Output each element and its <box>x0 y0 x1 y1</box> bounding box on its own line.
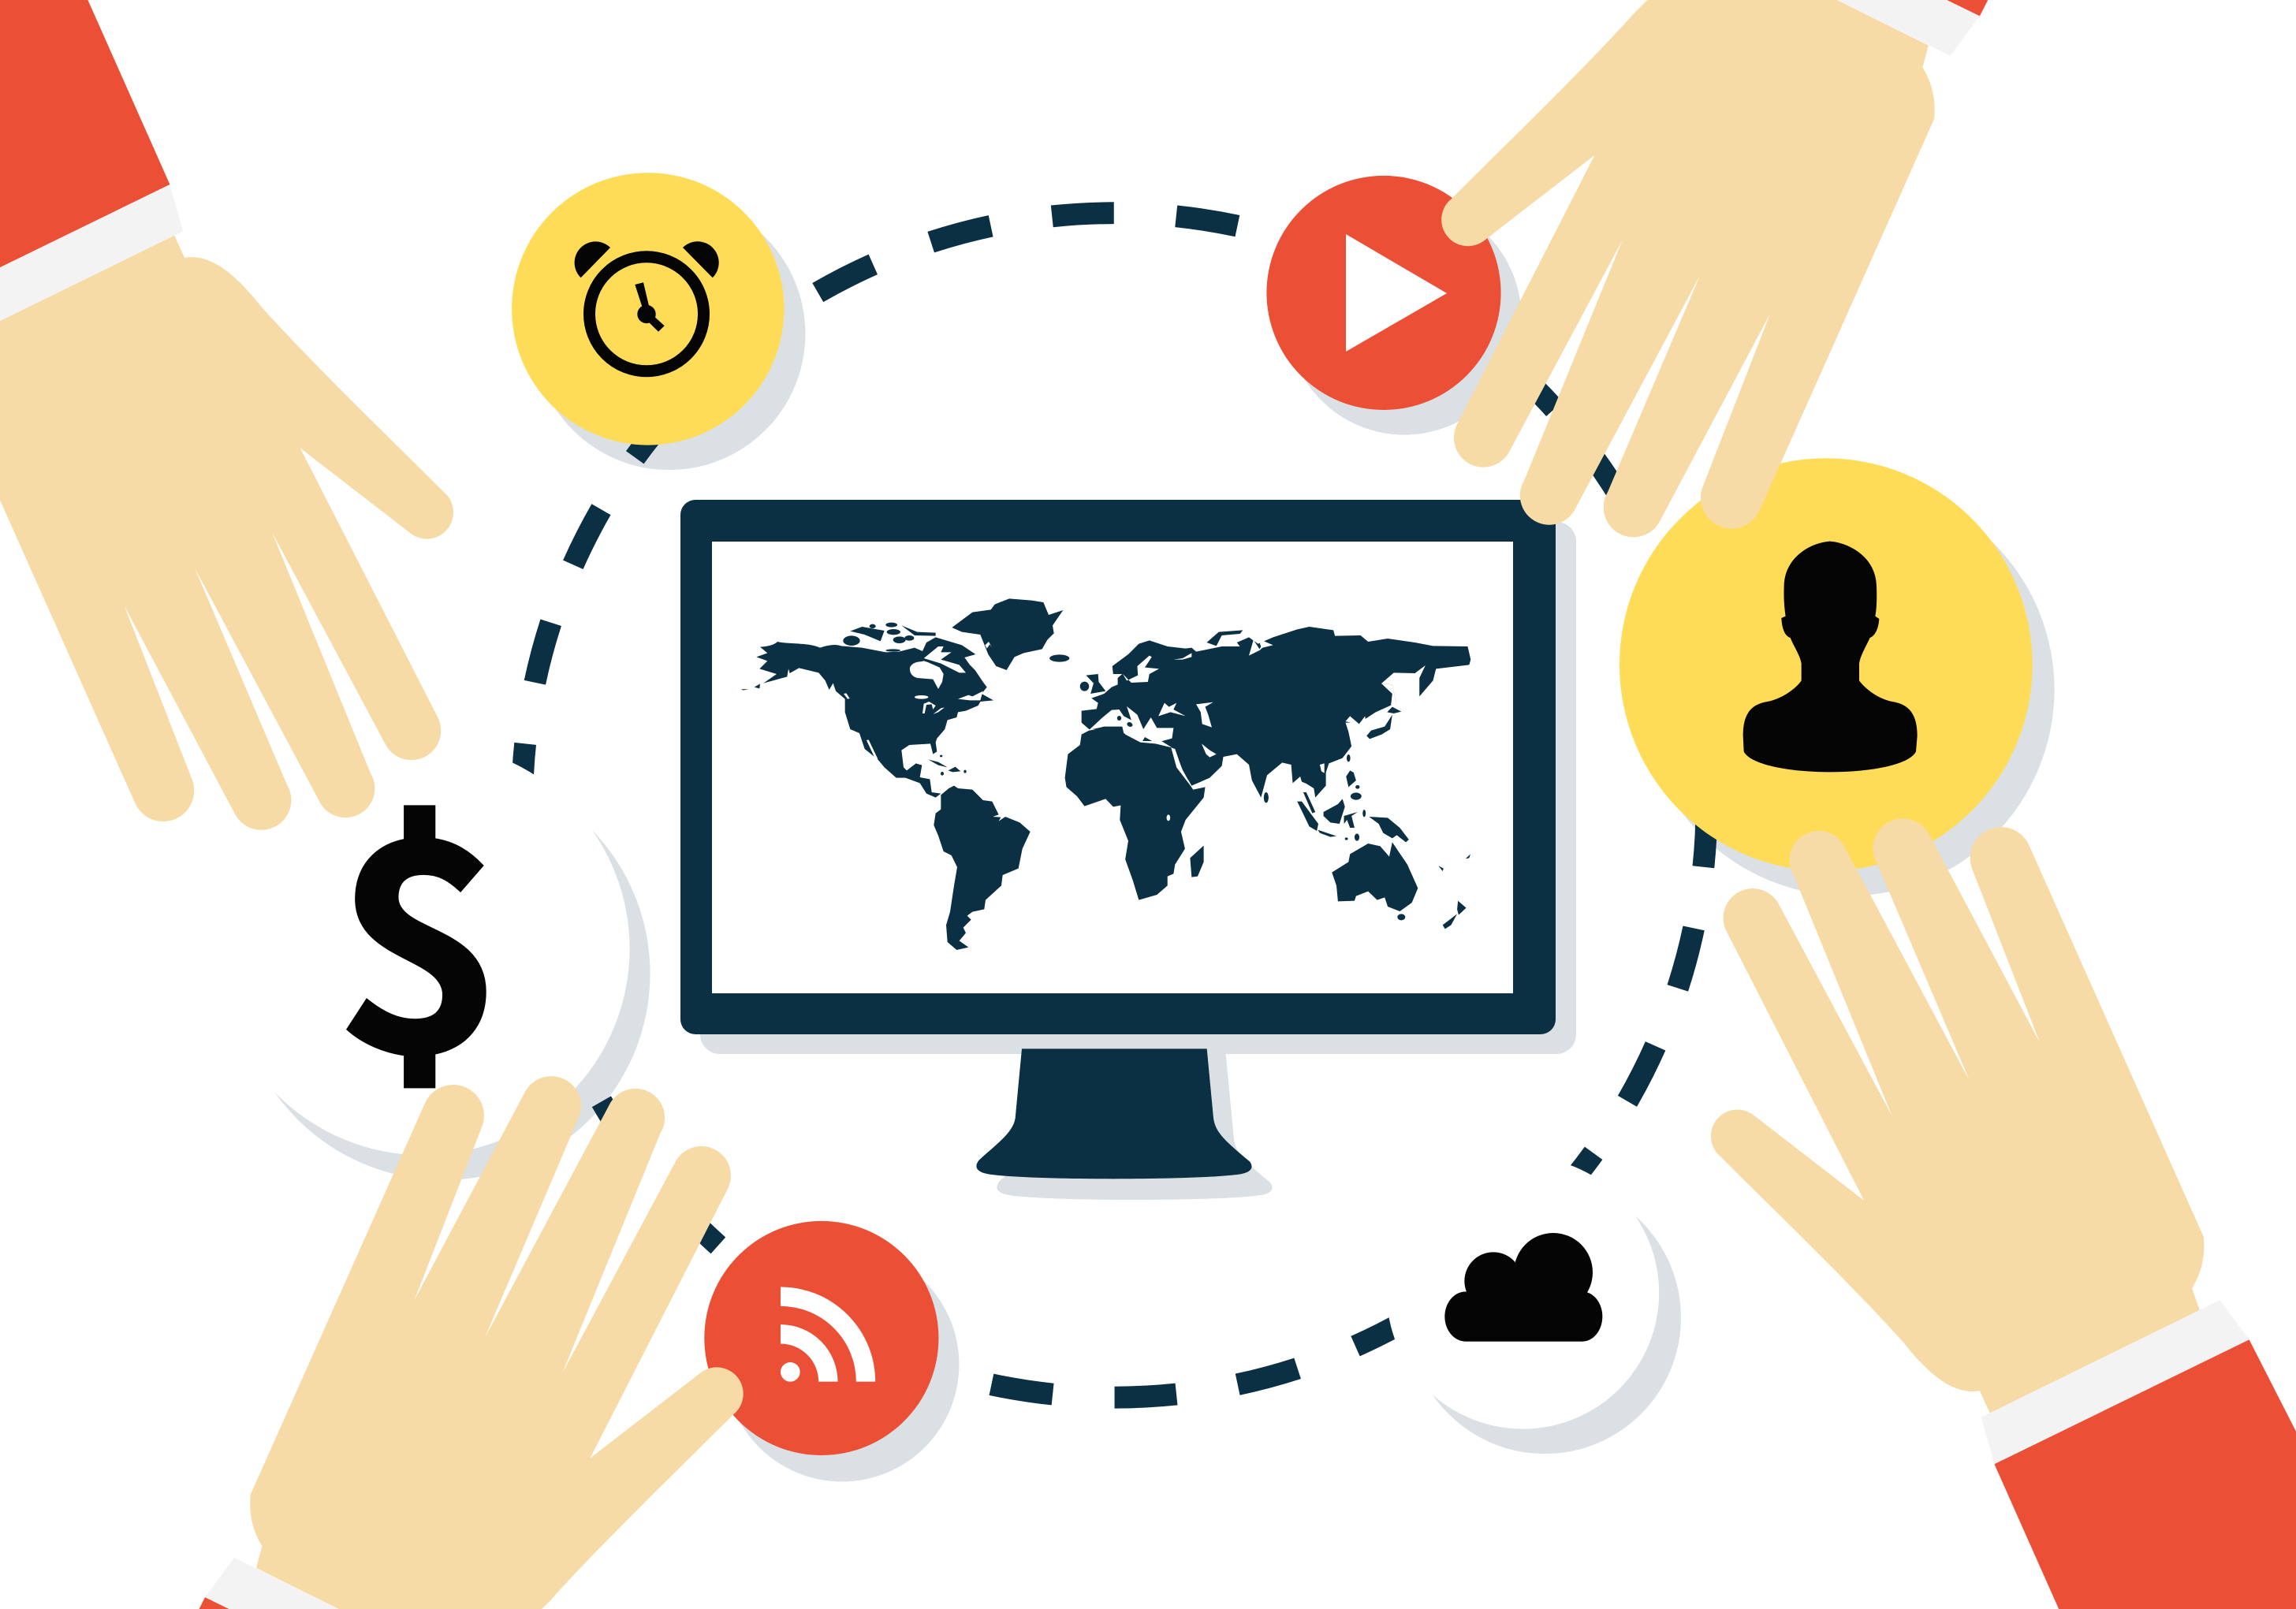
person circle <box>1620 458 2033 871</box>
monitor shadow <box>700 522 1576 1200</box>
icon: person silhouette <box>1743 542 1918 772</box>
icon: dollar sign: $ <box>334 717 505 1134</box>
hand: bottom right <box>1711 818 2296 1609</box>
americas and greenland <box>741 598 1063 950</box>
icon: alarm clock <box>575 241 719 371</box>
play circle <box>1266 176 1501 410</box>
monitor screen <box>712 542 1513 993</box>
world map <box>741 598 1470 950</box>
icon: cloud <box>1444 1233 1602 1342</box>
icon: play triangle <box>1346 234 1447 352</box>
cloud circle <box>1387 1156 1659 1429</box>
monitor frame <box>680 500 1556 1034</box>
monitor stand <box>976 1048 1252 1179</box>
hand: bottom left <box>199 1076 744 1609</box>
icon: rss feed <box>781 1297 866 1382</box>
eurasia africa australia <box>1049 627 1470 929</box>
clock circle <box>512 173 784 445</box>
hand: top left <box>0 0 453 830</box>
hand: top right <box>1441 0 1988 537</box>
dashed ring connecting icons <box>522 213 1706 1398</box>
monitor <box>680 500 1576 1200</box>
rss circle <box>704 1221 938 1455</box>
icon circles <box>217 173 2033 1455</box>
icon shadows <box>237 198 2055 1481</box>
dollar circle <box>217 743 630 1155</box>
